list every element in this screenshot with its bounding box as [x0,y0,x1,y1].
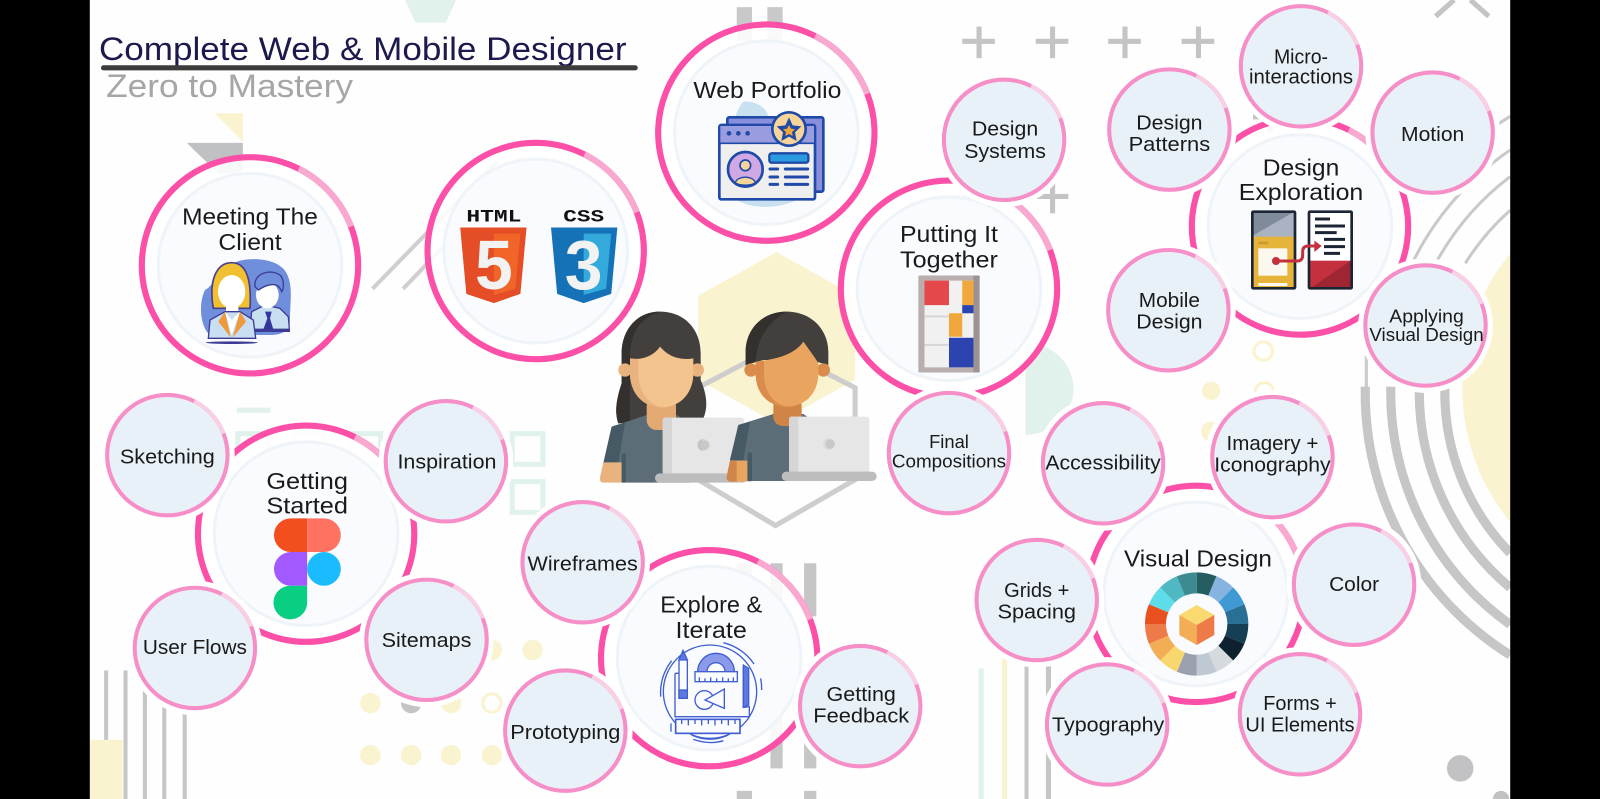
node: mobile design: Design [1136,312,1203,334]
node: getting feedback [779,625,941,787]
panel: html and css [390,106,681,397]
icon: html5 logo: HTML [466,208,521,227]
node: applying visual design [1345,245,1506,406]
node: grids and spacing: Spacing [997,601,1076,623]
node: getting feedback: Getting [827,684,896,706]
node: final compositions: Compositions [892,450,1006,471]
node: forms and ui elements [1219,633,1381,795]
node: design systems [923,59,1085,221]
subtitle: Zero to Mastery [106,67,354,104]
node: final compositions: Final [929,431,969,452]
node: typography: Typography [1052,715,1165,737]
node: applying visual design: Applying [1389,305,1464,326]
icon: html5 logo: 5 [475,226,513,304]
icon: portfolio window [719,101,823,207]
node: color [1273,504,1435,666]
heading underline [101,65,638,70]
node: sketching: Sketching [120,446,215,468]
node: design patterns [1088,49,1250,211]
heading: explore and iterate: Explore & [660,591,763,617]
node: user flows: User Flows [143,637,247,659]
node: forms and ui elements: UI Elements [1245,715,1355,737]
panel: putting it together [804,143,1094,434]
panel: getting started: Started [266,492,348,518]
icon: html5 logo [460,208,527,304]
panel: explore and iterate [564,513,855,799]
woman with laptop [600,312,747,483]
node: design systems: Systems [964,141,1046,163]
panel: meeting the client [105,120,395,411]
panel: visual design [1050,448,1341,739]
panel: meeting the client: Client [218,229,282,255]
node: getting feedback: Feedback [813,705,910,727]
title [99,30,638,104]
panel: design exploration [1155,81,1445,372]
node: micro-interactions: Micro- [1274,46,1328,68]
heading: getting started: Getting [266,468,348,494]
man with laptop [727,312,877,482]
icon: css3 logo [551,208,617,304]
node: wireframes [502,481,664,643]
heading: design exploration: Design [1263,155,1339,181]
node: final compositions [868,372,1030,534]
panel: putting it together: Together [900,246,998,272]
node: imagery and iconography [1191,376,1353,538]
node: prototyping [484,650,646,799]
node: typography [1026,644,1188,799]
panel: design exploration: Exploration [1239,179,1363,205]
node: design systems: Design [972,119,1038,141]
node: forms and ui elements: Forms + [1263,693,1337,715]
node: mobile design [1087,229,1249,391]
node: micro-interactions: interactions [1249,67,1353,89]
node: imagery and iconography: Imagery + [1227,433,1318,455]
node: imagery and iconography: Iconography [1214,454,1331,476]
icon: figma logo [273,518,341,619]
node: accessibility: Accessibility [1045,452,1162,474]
node: micro-interactions [1220,0,1382,147]
node: grids and spacing: Grids + [1004,580,1069,602]
heading: Complete Web & Mobile Designer [99,30,627,67]
icon: layout composition [918,276,980,372]
node: inspiration: Inspiration [397,451,496,473]
node: user flows [114,567,276,729]
node: mobile design: Mobile [1139,290,1200,312]
icon: css3 logo: CSS [563,208,604,227]
heading: meeting the client: Meeting The [182,203,318,229]
icon: two phone screens [1252,212,1352,288]
icon: drafting tools [661,643,762,743]
heading: visual design: Visual Design [1124,545,1272,571]
node: grids and spacing [956,519,1118,681]
node: prototyping: Prototyping [510,722,620,744]
icon: client people [201,259,291,344]
heading: web portfolio: Web Portfolio [693,77,841,103]
node: color: Color [1329,574,1379,596]
node: sitemaps: Sitemaps [382,630,471,652]
panel: explore and iterate: Iterate [676,617,747,643]
node: motion [1352,52,1514,214]
heading: putting it together: Putting It [900,221,998,247]
node: sketching [86,374,248,536]
illustration: two designers at laptops [600,312,877,483]
node: accessibility [1022,382,1184,544]
node: wireframes: Wireframes [528,553,638,575]
node: design patterns: Patterns [1129,134,1210,156]
node: design patterns: Design [1136,113,1203,135]
panel: getting started [161,388,452,679]
panel: web portfolio [621,0,912,278]
icon: colour wheel [1138,566,1255,682]
node: applying visual design: Visual Design [1369,324,1484,345]
node: sitemaps [346,559,508,721]
node: inspiration [365,380,527,542]
icon: css3 logo: 3 [565,226,603,304]
node: motion: Motion [1401,124,1464,146]
